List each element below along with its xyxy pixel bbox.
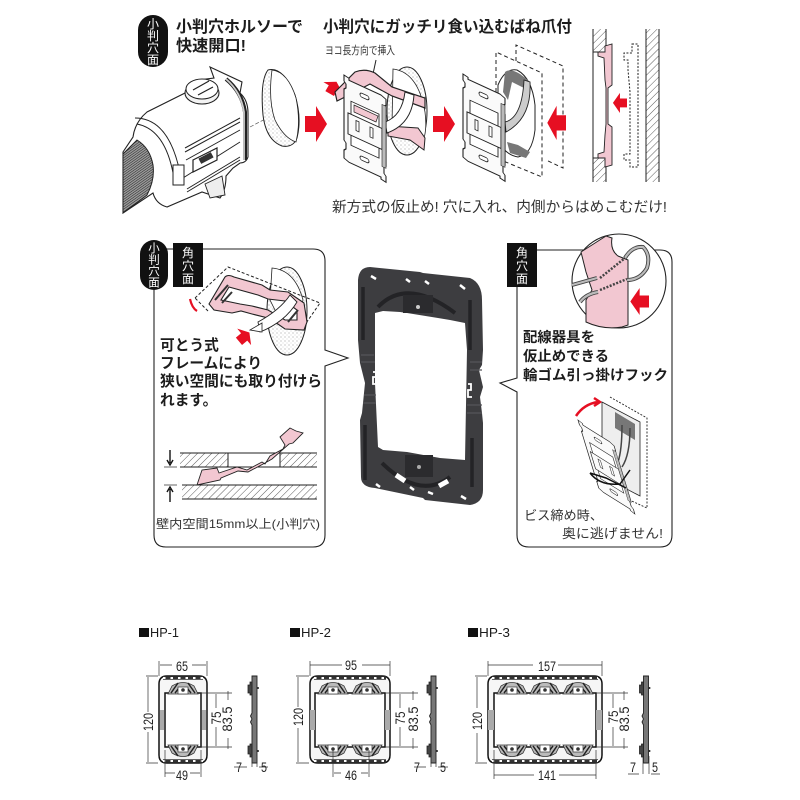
dimensions HP-3: 75 — [605, 710, 621, 724]
note: insert direction: ヨコ長方向で挿入 — [325, 43, 395, 57]
dimensions HP-2 — [290, 657, 448, 783]
side view HP-2 — [427, 676, 438, 763]
dimensions HP-3: 120 — [469, 712, 485, 730]
heading: spring claw: 小判穴にガッチリ食い込むばね爪付 — [323, 17, 572, 36]
text: hook description: 配線器具を — [523, 329, 595, 346]
side view HP-1 — [248, 676, 259, 763]
illustration: plate tilted with rubber band — [578, 397, 647, 514]
icon: hook detail circle — [572, 234, 666, 328]
dimensions HP-2: 83.5 — [405, 706, 421, 732]
arrow: red to step 2 — [433, 106, 455, 142]
badge: 角穴面 — [507, 243, 537, 287]
badge: 小判穴面: 判 — [148, 254, 160, 266]
leader line — [373, 60, 376, 74]
badge: 角穴面: 角 — [516, 246, 528, 260]
dimensions HP-3: 7 — [630, 759, 636, 775]
caption: screws: ビス締め時、 — [524, 508, 603, 523]
dimension drawing: HP-3 — [468, 626, 660, 783]
badge: 角穴面: 穴 — [182, 259, 194, 273]
text: flexible frame description: 可とう式 — [160, 337, 219, 354]
product photo: black frame — [358, 267, 483, 505]
text: flexible frame description: 狭い空間にも取り付けら — [160, 372, 322, 390]
front view HP-1 — [159, 676, 207, 763]
arrow: red from back — [547, 106, 566, 140]
arrow: red curved up — [576, 398, 600, 416]
text: flexible frame description: れます。 — [160, 392, 217, 409]
dimensions HP-1: 5 — [261, 759, 267, 775]
dimensions HP-1: 49 — [176, 767, 188, 783]
front view HP-2 — [310, 676, 390, 763]
panel: rubber band hook — [500, 234, 672, 547]
dimension drawing: HP-2 — [290, 626, 448, 783]
dimensions HP-2: 75 — [392, 711, 408, 724]
label HP-3: HP-3 — [479, 626, 510, 640]
dimensions HP-1 — [140, 658, 268, 783]
badge: 小判穴面 (top) — [138, 15, 168, 67]
dimensions HP-3: 157 — [538, 658, 556, 674]
illustration: hole saw drill — [123, 67, 248, 213]
caption: screws: 奥に逃げません! — [562, 526, 663, 541]
dimensions HP-1: 75 — [208, 711, 224, 724]
illustration: step 2 frame and dashed wall — [463, 45, 563, 181]
side view HP-3 — [640, 676, 650, 763]
badge: 小判穴面: 穴 — [148, 265, 160, 278]
text: flexible frame description: フレームにより — [160, 355, 262, 372]
dimensions HP-2: 46 — [345, 767, 357, 783]
dimensions HP-2: 95 — [345, 657, 357, 673]
arrow: red curved — [190, 299, 197, 311]
illustration: step 1 frame into hole — [335, 67, 427, 182]
dimensions HP-3: 83.5 — [616, 706, 632, 732]
diagram: wall clearance — [164, 428, 317, 502]
dimensions HP-2: 7 — [414, 759, 420, 775]
badge: 小判穴面 (top): 判 — [147, 29, 159, 43]
dimensions HP-2: 5 — [440, 759, 446, 775]
heading: hole saw — [176, 17, 303, 55]
dimensions HP-1: 120 — [140, 713, 156, 731]
caption: wall clearance: 壁内空間15mm以上(小判穴) — [156, 517, 320, 531]
label HP-3 — [468, 626, 510, 640]
illustration: wall section — [593, 29, 659, 182]
dimensions HP-3: 5 — [652, 759, 658, 775]
dimensions HP-3 — [469, 658, 660, 783]
badge: 角穴面: 穴 — [516, 259, 528, 273]
heading: hole saw: 快速開口! — [176, 37, 246, 55]
badge: 小判穴面 (top): 小 — [147, 17, 159, 31]
label HP-1: HP-1 — [150, 626, 179, 640]
arrow: red to hook — [630, 288, 649, 315]
heading: hole saw: 小判穴ホルソーで — [176, 17, 303, 36]
dimensions HP-1: 83.5 — [219, 706, 235, 732]
label HP-2 — [290, 626, 331, 640]
dimensions HP-2: 120 — [290, 708, 306, 726]
badge: 小判穴面 (top): 面 — [147, 53, 159, 67]
arrow: red small — [613, 93, 627, 113]
front view HP-3 — [488, 676, 602, 763]
badge: 角穴面: 面 — [516, 272, 528, 286]
text: hook description: 輪ゴム引っ掛けフック — [523, 366, 668, 384]
badge: 角穴面: 面 — [182, 272, 194, 286]
badge: 小判穴面 (top): 穴 — [147, 41, 159, 55]
dimensions HP-1: 7 — [236, 759, 242, 775]
badge: 角穴面: 角 — [182, 246, 194, 260]
dimension drawing: HP-1 — [139, 626, 268, 783]
label HP-2: HP-2 — [301, 626, 331, 640]
badge: 小判穴面: 小 — [148, 242, 160, 255]
caption: screws — [524, 508, 663, 541]
text: hook description: 仮止めできる — [523, 348, 609, 365]
panel: flexible frame — [140, 240, 348, 547]
arrow: red to step 1 — [305, 106, 327, 142]
badge: 小判穴面 — [140, 240, 168, 290]
text: hook description — [523, 329, 668, 384]
badge: 小判穴面: 面 — [148, 278, 160, 290]
text: flexible frame description — [160, 337, 322, 409]
dimensions HP-1: 65 — [176, 658, 188, 674]
illustration: cut disc — [262, 70, 299, 146]
arrow: red lower — [232, 324, 256, 350]
arrow: red insert — [320, 76, 346, 99]
dimensions HP-3: 141 — [538, 767, 556, 783]
badge: 角穴面 — [173, 243, 203, 287]
illustration: axis line — [250, 106, 290, 127]
caption: new method: 新方式の仮止め! 穴に入れ、内側からはめこむだけ! — [332, 199, 667, 216]
illustration: bent pink frame — [195, 267, 320, 355]
